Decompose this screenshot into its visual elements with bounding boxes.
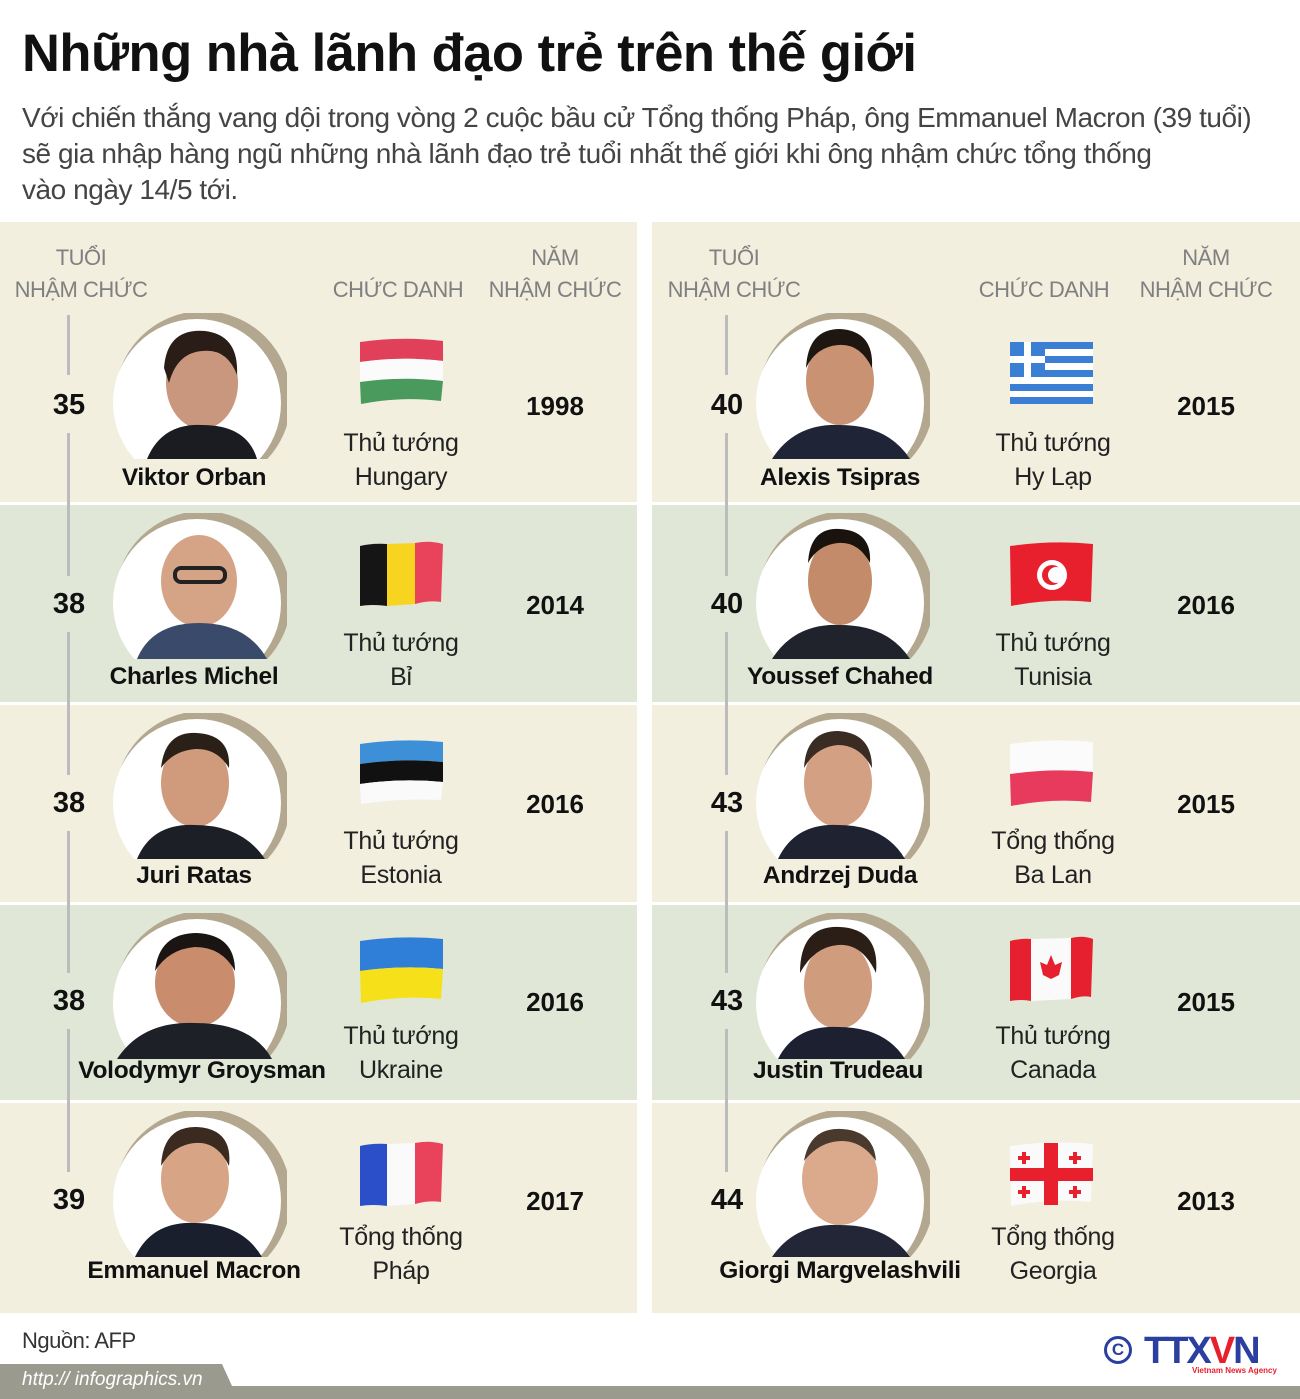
title: Những nhà lãnh đạo trẻ trên thế giới bbox=[22, 24, 916, 83]
headers left: NHẬM CHỨC bbox=[15, 277, 147, 302]
row: Volodymyr Groysman: Ukraine bbox=[359, 1056, 443, 1084]
row: Emmanuel Macron: Tổng thống bbox=[339, 1223, 463, 1251]
flag: Ukraine bbox=[360, 937, 443, 1003]
row: Youssef Chahed: Thủ tướng bbox=[995, 629, 1111, 657]
row: Juri Ratas bbox=[53, 713, 584, 889]
row: Volodymyr Groysman: 38 bbox=[53, 985, 85, 1017]
row: Juri Ratas: Thủ tướng bbox=[343, 827, 459, 855]
row: Justin Trudeau: 43 bbox=[711, 985, 743, 1017]
headers left: CHỨC DANH bbox=[333, 277, 463, 302]
row: Viktor Orban bbox=[53, 313, 584, 491]
row: Justin Trudeau bbox=[711, 913, 1235, 1084]
flag: Poland bbox=[1010, 740, 1093, 806]
logo: TTXVN: C bbox=[1112, 1340, 1124, 1359]
row: Giorgi Margvelashvili: 2013 bbox=[1177, 1186, 1235, 1216]
headers right bbox=[668, 244, 1272, 302]
headers left: NHẬM CHỨC bbox=[489, 277, 621, 302]
row: Viktor Orban: Thủ tướng bbox=[343, 429, 459, 457]
row: Andrzej Duda bbox=[711, 713, 1235, 889]
row: Juri Ratas: 2016 bbox=[526, 789, 584, 819]
row: Giorgi Margvelashvili bbox=[711, 1111, 1235, 1285]
flag: Greece bbox=[1010, 342, 1093, 404]
row: Charles Michel: 2014 bbox=[526, 590, 584, 620]
headers right: NHẬM CHỨC bbox=[668, 277, 800, 302]
row: Juri Ratas: Juri Ratas bbox=[136, 862, 252, 889]
footer bar: http:// infographics.vn bbox=[22, 1369, 203, 1390]
flag: France bbox=[360, 1142, 443, 1206]
row: Volodymyr Groysman bbox=[53, 913, 584, 1084]
flag: Tunisia bbox=[1010, 542, 1093, 606]
intro text bbox=[22, 102, 1251, 205]
row: Emmanuel Macron: 39 bbox=[53, 1184, 85, 1216]
row: Andrzej Duda: 2015 bbox=[1177, 789, 1235, 819]
row: Alexis Tsipras: Hy Lạp bbox=[1014, 463, 1092, 491]
row: Justin Trudeau: Thủ tướng bbox=[995, 1022, 1111, 1050]
headers right: NHẬM CHỨC bbox=[1140, 277, 1272, 302]
flag: Estonia bbox=[360, 740, 443, 804]
row: Justin Trudeau: Canada bbox=[1010, 1056, 1096, 1084]
flag: Belgium bbox=[360, 542, 443, 606]
photo bbox=[113, 713, 287, 859]
row: Giorgi Margvelashvili: Giorgi Margvelashvili bbox=[719, 1257, 961, 1284]
row: Emmanuel Macron: Emmanuel Macron bbox=[87, 1257, 301, 1284]
headers left: TUỔI bbox=[56, 245, 106, 270]
headers right: TUỔI bbox=[709, 245, 759, 270]
photo bbox=[756, 1111, 930, 1257]
row: Andrzej Duda: 43 bbox=[711, 787, 743, 819]
row: Emmanuel Macron: Pháp bbox=[372, 1257, 430, 1285]
flag: Canada bbox=[1010, 936, 1093, 1001]
intro text: sẽ gia nhập hàng ngũ những nhà lãnh đạo trẻ tuổi nhất thế giới khi ông nhậm chức tổng thống bbox=[22, 138, 1152, 169]
logo: TTXVN: TTXVN bbox=[1144, 1330, 1259, 1372]
row: Giorgi Margvelashvili: 44 bbox=[711, 1184, 743, 1216]
row: Volodymyr Groysman: 2016 bbox=[526, 987, 584, 1017]
row: Justin Trudeau: 2015 bbox=[1177, 987, 1235, 1017]
row: Youssef Chahed bbox=[711, 513, 1235, 691]
timeline right bbox=[725, 315, 728, 1172]
row: Alexis Tsipras: 2015 bbox=[1177, 391, 1235, 421]
row: Andrzej Duda: Andrzej Duda bbox=[763, 862, 917, 889]
photo bbox=[756, 513, 930, 659]
row: Alexis Tsipras: 40 bbox=[711, 389, 743, 421]
row: Andrzej Duda: Ba Lan bbox=[1014, 861, 1092, 889]
row: Viktor Orban: Viktor Orban bbox=[122, 464, 266, 491]
row: Viktor Orban: Hungary bbox=[355, 463, 447, 491]
photo bbox=[113, 313, 287, 459]
logo: TTXVN: Vietnam News Agency bbox=[1192, 1366, 1277, 1375]
headers right: NĂM bbox=[1182, 245, 1230, 270]
headers left bbox=[15, 244, 621, 302]
row: Youssef Chahed: Tunisia bbox=[1014, 663, 1092, 691]
panel: right bbox=[652, 222, 1300, 1313]
intro text: Với chiến thắng vang dội trong vòng 2 cuộc bầu cử Tổng thống Pháp, ông Emmanuel Macron (39 tuổi) bbox=[22, 102, 1251, 133]
headers left: NĂM bbox=[531, 245, 579, 270]
row: Alexis Tsipras bbox=[711, 313, 1235, 491]
logo: TTXVN bbox=[1104, 1330, 1277, 1375]
panel: left bbox=[0, 222, 637, 1313]
headers right: CHỨC DANH bbox=[979, 277, 1109, 302]
row: Giorgi Margvelashvili: Georgia bbox=[1010, 1257, 1096, 1285]
row: Charles Michel: Thủ tướng bbox=[343, 629, 459, 657]
row: Viktor Orban: 1998 bbox=[526, 391, 584, 421]
timeline left bbox=[67, 315, 70, 1172]
photo bbox=[113, 1111, 287, 1257]
row: Justin Trudeau: Justin Trudeau bbox=[753, 1057, 923, 1084]
photo bbox=[113, 513, 287, 659]
row: Charles Michel: Charles Michel bbox=[110, 663, 278, 690]
row: Alexis Tsipras: Alexis Tsipras bbox=[760, 464, 920, 491]
row: Youssef Chahed: 40 bbox=[711, 588, 743, 620]
row: Charles Michel bbox=[53, 513, 584, 691]
row: Alexis Tsipras: Thủ tướng bbox=[995, 429, 1111, 457]
row: Charles Michel: 38 bbox=[53, 588, 85, 620]
photo bbox=[756, 913, 930, 1059]
row: Youssef Chahed: Youssef Chahed bbox=[747, 663, 933, 690]
row: Emmanuel Macron bbox=[53, 1111, 584, 1285]
photo bbox=[113, 913, 287, 1059]
row: Juri Ratas: 38 bbox=[53, 787, 85, 819]
row: Giorgi Margvelashvili: Tổng thống bbox=[991, 1223, 1115, 1251]
intro text: vào ngày 14/5 tới. bbox=[22, 174, 238, 205]
row: Emmanuel Macron: 2017 bbox=[526, 1186, 584, 1216]
source: Nguồn: AFP bbox=[22, 1328, 136, 1353]
flag: Georgia bbox=[1010, 1142, 1093, 1206]
row: Volodymyr Groysman: Volodymyr Groysman bbox=[78, 1057, 326, 1084]
flag: Hungary bbox=[360, 338, 443, 404]
row: Viktor Orban: 35 bbox=[53, 389, 85, 421]
row: Juri Ratas: Estonia bbox=[360, 861, 442, 889]
row: Charles Michel: Bỉ bbox=[390, 663, 412, 691]
row: Andrzej Duda: Tổng thống bbox=[991, 827, 1115, 855]
row: Youssef Chahed: 2016 bbox=[1177, 590, 1235, 620]
photo bbox=[756, 713, 930, 859]
row: Volodymyr Groysman: Thủ tướng bbox=[343, 1022, 459, 1050]
photo bbox=[756, 313, 930, 459]
footer bar bbox=[0, 1364, 1300, 1399]
